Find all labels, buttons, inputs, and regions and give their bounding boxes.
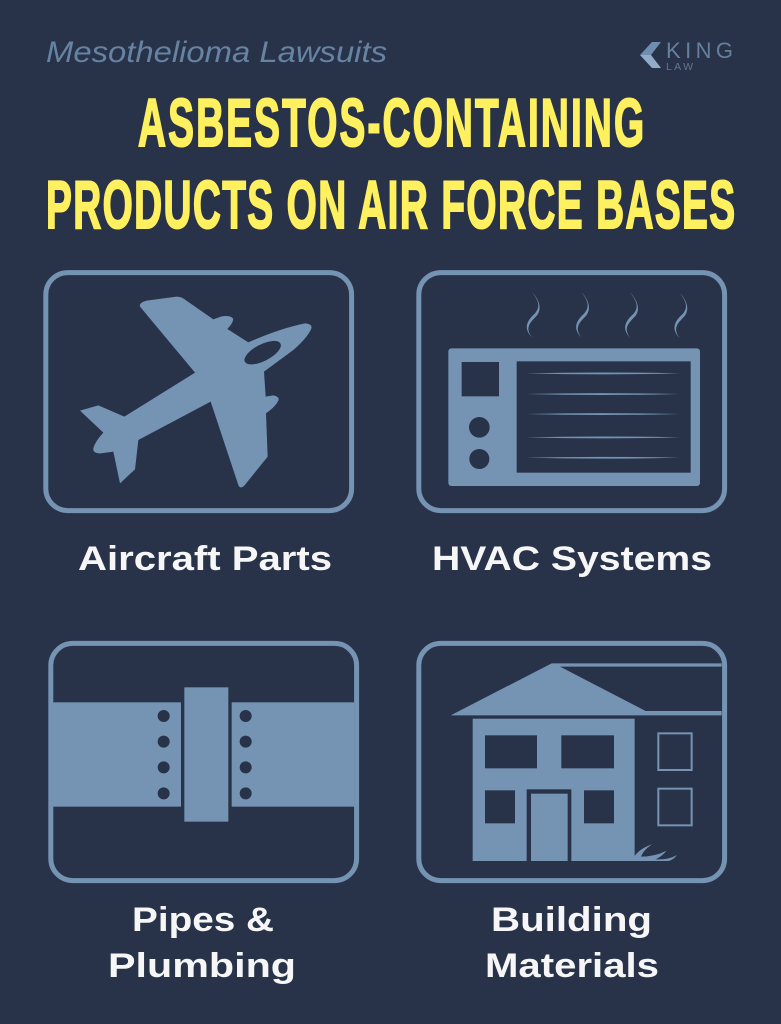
panel: building materials <box>419 643 725 881</box>
logo: King Law <box>640 38 733 73</box>
label: Pipes & Plumbing: Pipes & <box>132 901 274 939</box>
panel frame: pipes <box>51 643 357 881</box>
subtitle: Mesothelioma Lawsuits <box>46 36 387 69</box>
panel: HVAC systems <box>419 273 725 511</box>
panel: aircraft parts <box>46 273 352 511</box>
panel frame: building <box>419 643 725 881</box>
label: Pipes & Plumbing <box>108 901 296 985</box>
logo: King Law: LAW <box>666 61 693 73</box>
panel: pipes and plumbing <box>51 643 357 881</box>
label: HVAC Systems: HVAC Systems <box>432 540 712 578</box>
title <box>46 85 735 243</box>
label: Building Materials: Building <box>491 901 652 939</box>
icon: pipe joint <box>53 687 354 822</box>
label: Pipes & Plumbing: Plumbing <box>108 947 296 985</box>
title: ASBESTOS-CONTAINING <box>138 85 644 161</box>
panel frame: HVAC <box>419 273 725 511</box>
panel frame: aircraft <box>46 273 352 511</box>
label: Aircraft Parts: Aircraft Parts <box>78 540 332 578</box>
icon: house <box>451 663 722 861</box>
label: Building Materials: Materials <box>485 947 659 985</box>
label: Building Materials <box>485 901 659 985</box>
icon: HVAC unit <box>448 292 700 486</box>
icon: jet aircraft <box>80 297 312 487</box>
title: PRODUCTS ON AIR FORCE BASES <box>46 167 735 243</box>
logo: King Law: KING <box>666 38 733 63</box>
